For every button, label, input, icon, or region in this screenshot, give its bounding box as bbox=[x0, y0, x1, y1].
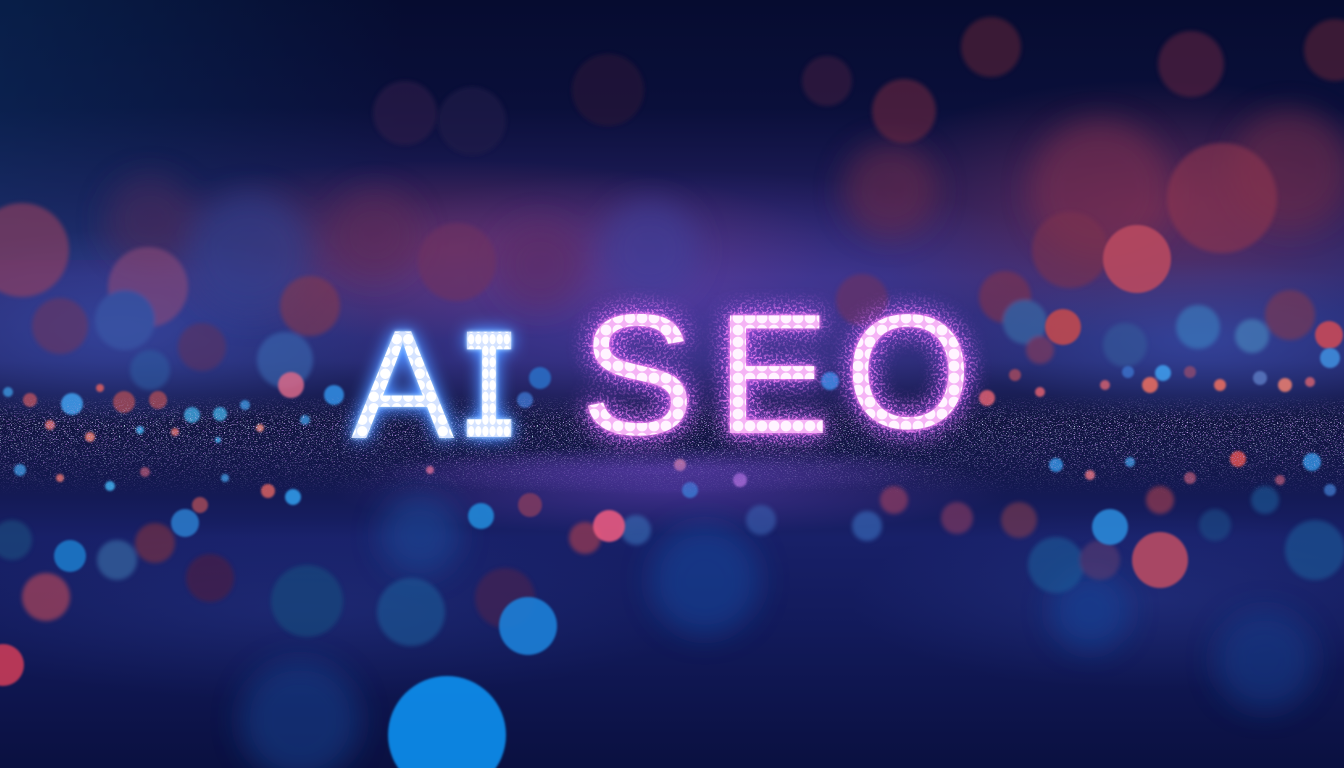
title word: AI bbox=[351, 298, 519, 485]
letter E: E bbox=[716, 279, 830, 470]
ground glow under the letters bbox=[360, 446, 960, 494]
large soft background bokeh bbox=[105, 110, 1344, 768]
letter A: A bbox=[351, 298, 455, 471]
bright bokeh circles bbox=[0, 225, 1343, 768]
letter O: O bbox=[845, 280, 972, 463]
small bokeh confetti band bbox=[3, 348, 1340, 517]
letter S: S bbox=[580, 279, 695, 471]
title word: SEO bbox=[580, 279, 972, 471]
letter I: I bbox=[459, 304, 519, 485]
glitter ground band bbox=[0, 395, 1344, 495]
